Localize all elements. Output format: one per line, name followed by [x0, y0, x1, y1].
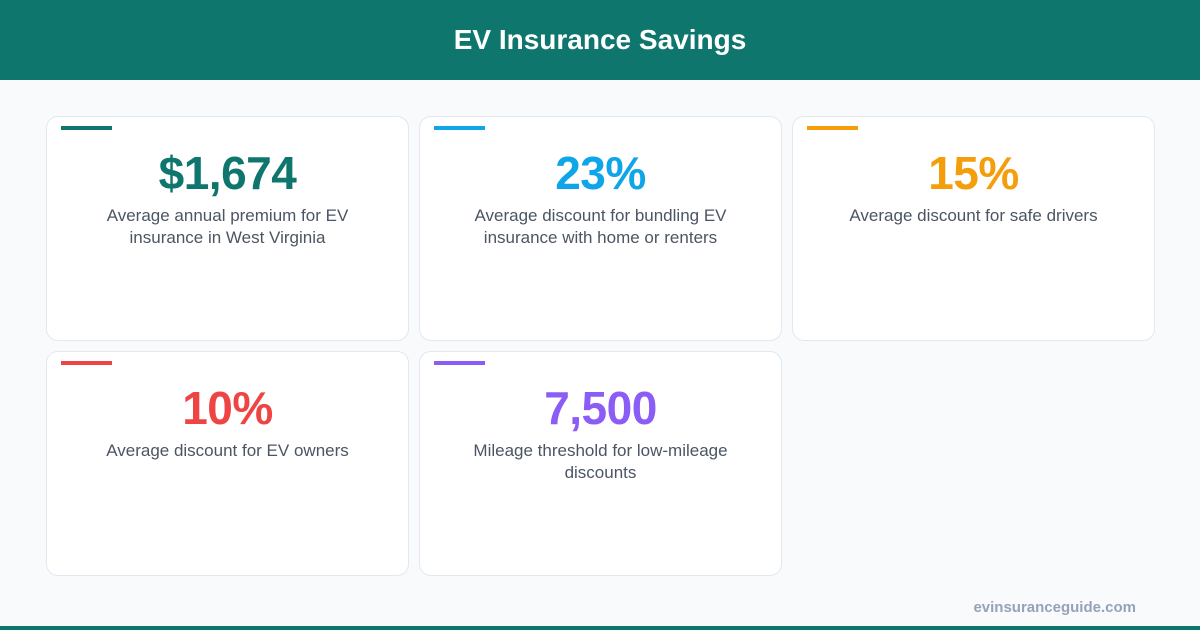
stat: 23%: 23%	[555, 147, 646, 199]
panel: annual premium: Average annual premium for EV insurance in West Virginia	[107, 206, 348, 247]
title: EV Insurance Savings	[454, 24, 746, 55]
panel: bundling discount	[419, 116, 782, 341]
panel: EV owners	[46, 351, 409, 576]
panel: safe drivers: Average discount for safe drivers	[849, 206, 1098, 225]
stat: 10%: 10%	[182, 382, 273, 434]
panel: annual premium	[46, 116, 409, 341]
panel: mileage threshold: Mileage threshold for low-mileage discounts	[473, 441, 728, 482]
panel: EV owners: Average discount for EV owners	[106, 441, 349, 460]
stat: $1,674: $1,674	[159, 147, 296, 199]
panel: mileage threshold	[419, 351, 782, 576]
title	[0, 0, 1200, 80]
panel: safe drivers	[792, 116, 1155, 341]
stat: 7,500: 7,500	[544, 382, 657, 434]
footer source: evinsuranceguide.com	[973, 599, 1136, 616]
panel: bundling discount: Average discount for bundling EV insurance with home or renters	[474, 206, 727, 247]
stat: 15%: 15%	[928, 147, 1019, 199]
